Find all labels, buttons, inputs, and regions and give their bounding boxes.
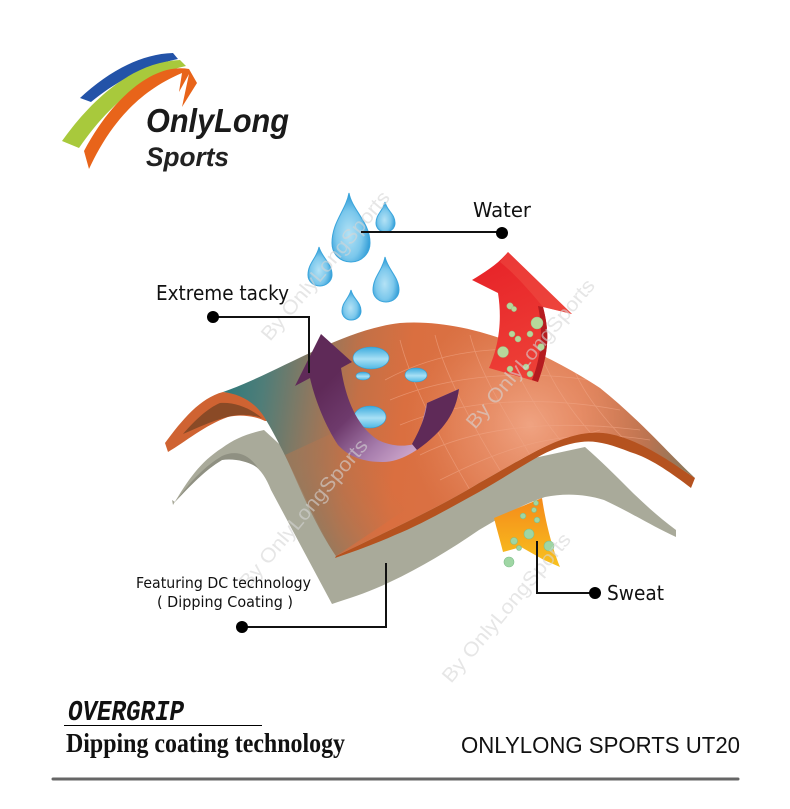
- watermark 3: By OnlyLongSports: [235, 435, 373, 593]
- callout: extreme tacky: Extreme tacky: [156, 281, 289, 305]
- red arrow: [472, 252, 572, 382]
- logo swoosh: orange: [84, 68, 197, 169]
- fabric brown lower edge: [335, 431, 695, 558]
- sweat bubbles: [504, 500, 554, 567]
- callout: sweat: Sweat: [607, 581, 664, 605]
- diagram: orange fabric layer: [165, 323, 695, 558]
- watermark 2: By OnlyLongSports: [462, 275, 600, 433]
- fabric face: [223, 323, 695, 556]
- watermark 1: By OnlyLongSports: [257, 187, 395, 345]
- water beads on fabric: [353, 347, 427, 428]
- watermark 4: By OnlyLongSports: [438, 529, 576, 687]
- watermarks: [235, 187, 600, 687]
- callout: extreme tacky: [156, 281, 309, 373]
- logo swoosh: green: [62, 60, 186, 148]
- footer model name: ONLYLONG SPORTS UT20: [461, 732, 740, 758]
- red arrow bubbles: [498, 303, 544, 377]
- fabric left flap: [165, 392, 290, 452]
- logo name: OnlyLong: [146, 102, 289, 139]
- callout: dipping coating: ( Dipping Coating ): [157, 593, 293, 611]
- infographic: [52, 53, 740, 780]
- water drops: [308, 193, 399, 320]
- callout: water: [361, 198, 532, 239]
- logo: [62, 53, 289, 172]
- callout: dipping coating: Featuring DC technology: [136, 574, 311, 592]
- logo swoosh: blue: [80, 53, 178, 102]
- fabric grid: [385, 335, 650, 495]
- callout: dipping coating: [136, 563, 386, 633]
- callout: water: Water: [473, 198, 532, 222]
- logo subtitle: Sports: [146, 142, 229, 172]
- callout: sweat: [537, 541, 664, 605]
- footer subtitle: Dipping coating technology: [66, 728, 345, 758]
- diagram: grey dipping coating layer: [172, 430, 676, 604]
- footer heading: overgrip: OVERGRIP: [68, 696, 184, 729]
- diagram: sweat arrow: [494, 498, 560, 567]
- purple arrow: [295, 334, 459, 462]
